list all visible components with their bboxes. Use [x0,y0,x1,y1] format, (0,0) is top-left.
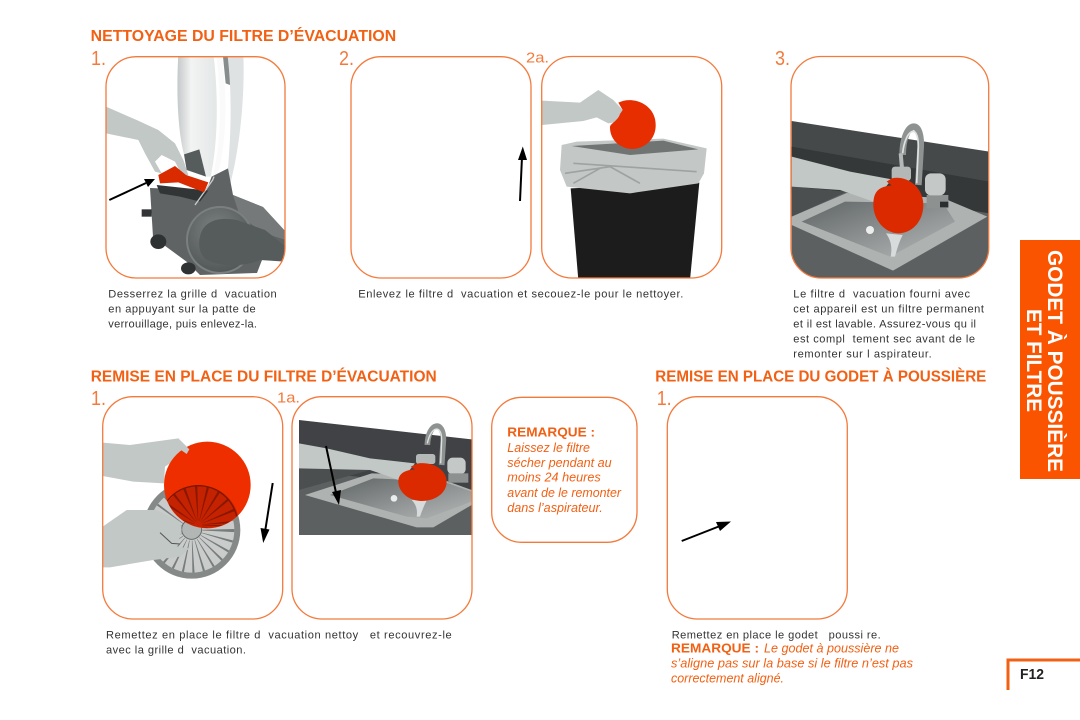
caption: replace dust cup with remark [671,629,914,686]
step number 1 godet: 1. [657,388,672,410]
caption: step 1: Desserrez la grille d vacuation [108,288,277,300]
caption: step 3: et il est lavable. Assurez-vous qu il [793,318,976,330]
panel: filter rinsing photo [292,397,472,619]
arrow [260,483,273,543]
caption: step 3: remonter sur l aspirateur. [793,349,932,361]
caption: step 2: Enlevez le filtre d vacuation et secouez-le pour le nettoyer. [358,288,683,300]
caption: replace dust cup with remark: s’aligne pas sur la base si le filtre n’est pas [671,657,914,671]
arrow [326,446,341,505]
step number 3: 3. [775,48,790,70]
heading: remise en place du godet: REMISE EN PLACE DU GODET À POUSSIÈRE [655,369,986,386]
photo: hand with filter above trash bin [542,90,707,280]
step number 1 lower: 1. [91,388,106,410]
caption: step 1 [108,288,277,330]
heading: nettoyage du filtre: NETTOYAGE DU FILTRE D’ÉVACUATION [91,28,396,45]
frame [791,56,989,278]
frame [542,56,722,278]
caption: replace filter [106,629,452,656]
step number 2a: 2a. [526,50,549,67]
caption: replace dust cup with remark: Le godet à poussière ne [764,642,899,656]
panel: step 2 empty photo with arrow [351,57,531,278]
caption: replace dust cup with remark: correctement aligné. [671,672,784,686]
photo: hands, filter and grille [103,438,251,579]
heading: remise en place du filtre: REMISE EN PLACE DU FILTRE D’ÉVACUATION [91,369,437,386]
panel: step 1 remove grille [106,53,286,278]
panel: step 2a shake filter over bin [542,56,722,280]
page number [1008,660,1080,690]
tab title line 2: ET FILTRE [1022,309,1045,412]
photo: filter under faucet [792,121,989,280]
note text: moins 24 heures [507,471,601,485]
tab title line 1: GODET À POUSSIÈRE [1043,250,1066,472]
frame [667,397,847,619]
callout: remarque drying [492,397,637,542]
arrow [109,179,155,200]
sidebar tab [1020,240,1080,479]
caption: replace dust cup with remark: Remettez en place le godet poussi re. [672,629,881,641]
frame [292,397,472,619]
page number: F12 [1020,666,1044,683]
frame [351,57,531,278]
note text: Laissez le filtre [507,441,590,455]
panel: replace filter on grille [103,397,283,619]
note text [507,425,622,515]
photo: vacuum base with hand on grille [106,53,286,275]
panel: replace dust cup, empty photo with arrow [667,397,847,619]
photo: sink scene [299,413,472,535]
caption: replace filter: Remettez en place le filtre d vacuation nettoy et recouvrez-le [106,629,452,641]
caption: step 1: en appuyant sur la patte de [108,303,256,315]
caption: step 3: cet appareil est un filtre permanent [793,303,984,315]
note text: avant de le remonter [507,486,622,500]
caption: step 3 [793,288,984,361]
arrow [518,146,527,201]
frame [103,397,283,619]
caption: replace filter: avec la grille d vacuation. [106,644,246,656]
caption: step 3: est compl tement sec avant de le [793,334,975,346]
frame [492,397,637,542]
step number 1: 1. [91,48,106,70]
caption: step 3: Le filtre d vacuation fourni avec [793,288,970,300]
panel: step 3 wash filter in sink [791,56,989,280]
step number 2: 2. [339,48,354,70]
step number 1a: 1a. [277,390,300,407]
note text: REMARQUE : [507,425,595,440]
arrow [682,522,731,541]
note text: sécher pendant au [507,456,612,470]
frame [106,57,285,278]
caption: step 1: verrouillage, puis enlevez-la. [108,318,257,330]
note text: dans l’aspirateur. [507,501,603,515]
caption: replace dust cup with remark: REMARQUE : [671,641,759,656]
